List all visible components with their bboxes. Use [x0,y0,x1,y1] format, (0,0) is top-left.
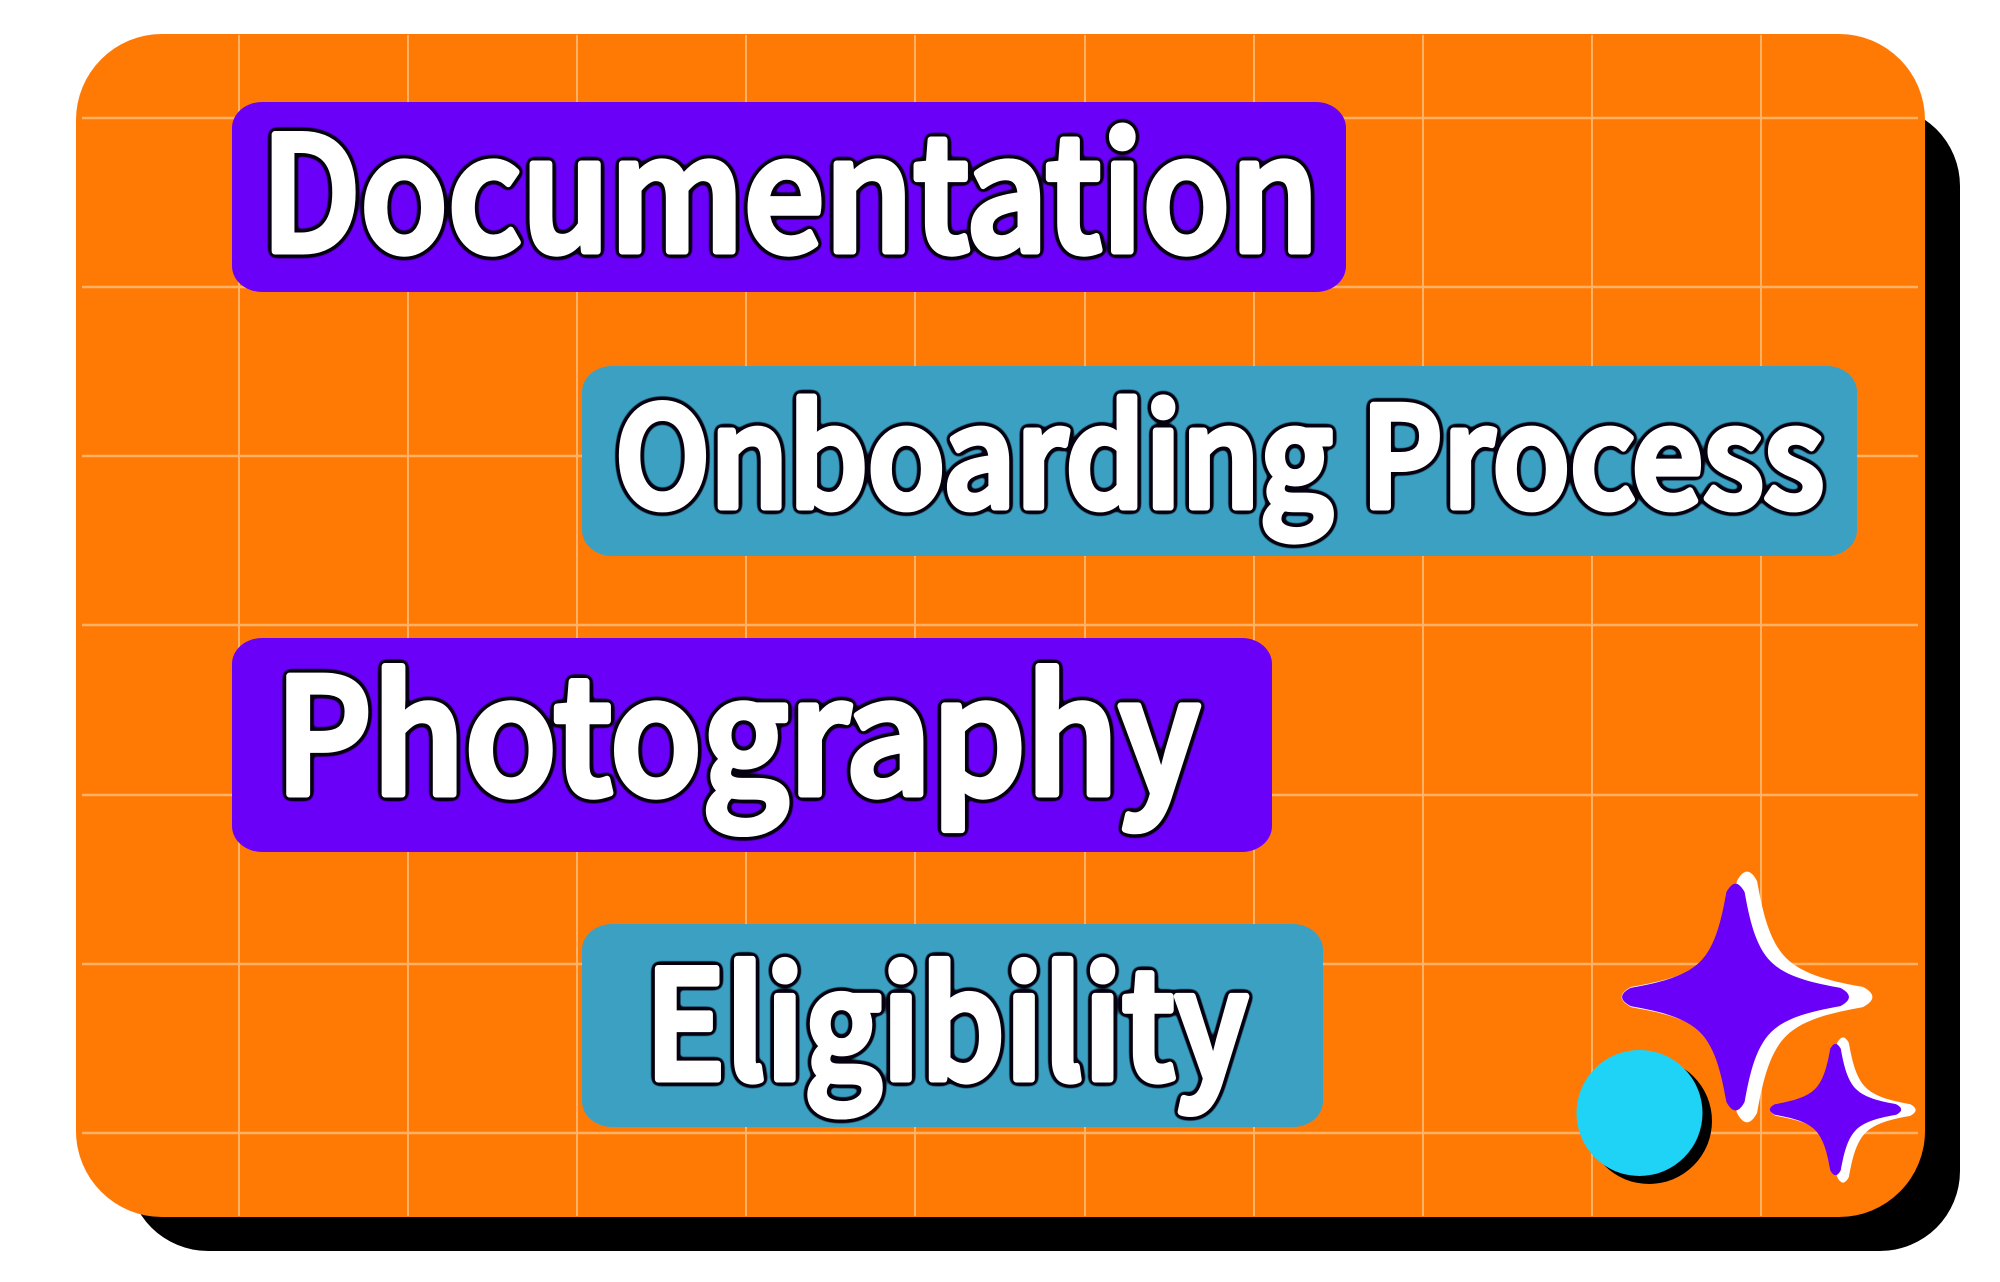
label: Eligibility: Eligibility [645,906,1248,1123]
icon: small sparkle [1770,1037,1916,1183]
icon: cyan circle with shadow [1576,1050,1712,1184]
label: Photography: Photography [275,609,1200,841]
label: Onboarding Process: Onboarding Process [615,347,1824,547]
icon: large sparkle [1622,872,1872,1122]
label: Documentation: Documentation [261,68,1319,297]
